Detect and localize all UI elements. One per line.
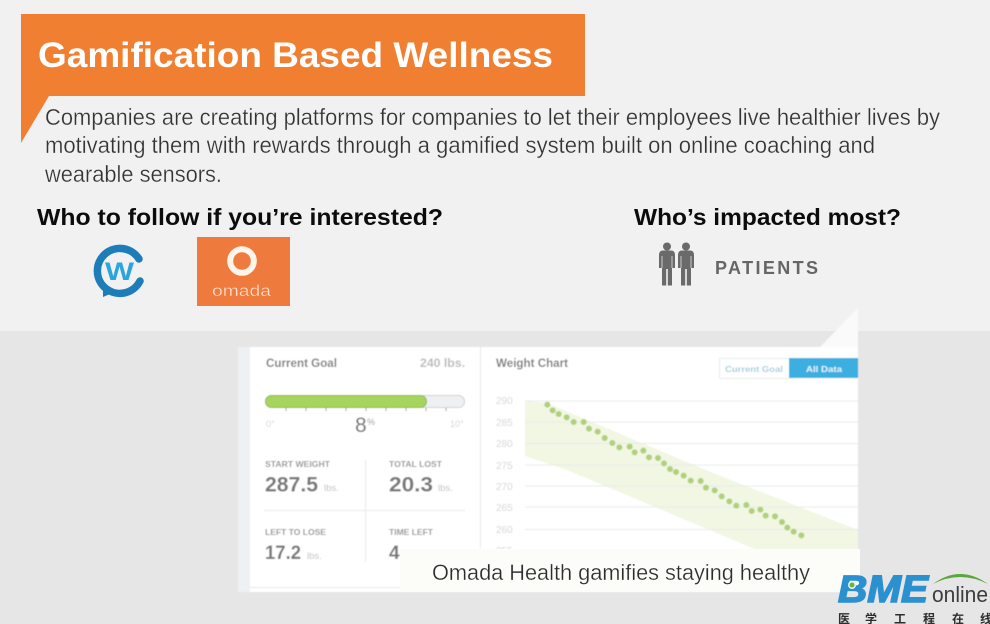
stat: left to lose: 17.2 — [265, 543, 301, 564]
stat: start weight — [265, 459, 339, 496]
caption — [400, 549, 860, 592]
panel: current goal: 0° — [266, 419, 275, 429]
banner shape — [21, 14, 585, 143]
axis labels: 270 — [496, 482, 513, 493]
intro text block: wearable sensors. — [44, 161, 222, 187]
stat: total lost: TOTAL LOST — [389, 459, 443, 469]
stat: total lost — [389, 459, 453, 496]
stat: total lost: lbs. — [438, 483, 453, 494]
panel: current goal: 240 lbs. — [420, 356, 465, 370]
axis labels: 285 — [496, 418, 513, 429]
panel edge — [238, 347, 250, 592]
axis labels: 265 — [496, 503, 513, 514]
heading: who to follow: Who to follow if you’re interested? — [37, 204, 443, 230]
heading: who's impacted: Who’s impacted most? — [634, 204, 901, 230]
chart band — [525, 401, 858, 550]
stat: left to lose: LEFT TO LOSE — [265, 527, 326, 537]
title banner — [21, 14, 585, 143]
axis labels: 255 — [496, 546, 513, 557]
axis labels: 280 — [496, 439, 513, 450]
intro text block — [44, 104, 940, 187]
stat: left to lose: lbs. — [307, 551, 322, 562]
icon: two people — [659, 242, 694, 286]
panel: weight chart: Weight Chart — [496, 358, 568, 370]
BME wordmark: BME — [838, 569, 930, 611]
panel body — [250, 347, 858, 592]
panel: current goal: 10° — [450, 419, 464, 429]
stat: start weight: START WEIGHT — [265, 459, 331, 469]
background: top section — [0, 0, 990, 331]
axis labels — [496, 396, 513, 557]
stat: start weight: lbs. — [324, 483, 339, 494]
title: Gamification Based Wellness — [38, 36, 553, 75]
eye dot — [848, 581, 856, 589]
grid lines — [525, 401, 858, 530]
panel: current goal: 8 — [355, 414, 367, 437]
logo: BME online — [838, 569, 990, 624]
panel: weight chart — [496, 358, 858, 557]
stat: time left — [389, 527, 434, 564]
panel: current goal: % — [367, 417, 375, 427]
axis labels: 260 — [496, 525, 513, 536]
logo: omada: omada — [212, 283, 271, 300]
logo: wellness W — [97, 248, 140, 297]
logo: omada — [197, 237, 290, 306]
progress bar — [266, 396, 464, 411]
data points — [544, 402, 804, 538]
dashboard screenshot — [238, 308, 858, 592]
stat: time left: TIME LEFT — [389, 527, 434, 537]
background: bottom section — [0, 331, 990, 624]
stat: time left: weeks — [406, 551, 434, 562]
axis labels: 290 — [496, 396, 513, 407]
stat: start weight: 287.5 — [265, 474, 318, 496]
dividers — [264, 347, 480, 562]
toggle: current goal — [720, 358, 790, 378]
callout pointer — [820, 308, 858, 347]
toggle: all data: All Data — [806, 365, 843, 374]
stat: left to lose — [265, 527, 326, 564]
axis labels: 275 — [496, 461, 513, 472]
arc — [933, 574, 988, 584]
intro text block: motivating them with rewards through a gamified system built on online coaching and — [45, 132, 875, 158]
label: patients: PATIENTS — [715, 258, 818, 278]
intro text block: Companies are creating platforms for companies to let their employees live healthier lives by — [45, 104, 940, 130]
caption: Omada Health gamifies staying healthy — [432, 560, 811, 585]
online wordmark: online — [932, 582, 988, 607]
stat: total lost: 20.3 — [389, 474, 433, 496]
toggle: current goal: Current Goal — [725, 365, 783, 374]
toggle: all data — [789, 358, 858, 378]
panel: current goal — [250, 347, 480, 588]
stat: time left: 4 — [389, 543, 400, 564]
panel: current goal: Current Goal — [266, 358, 337, 370]
logo: wellness W: W — [105, 258, 134, 286]
